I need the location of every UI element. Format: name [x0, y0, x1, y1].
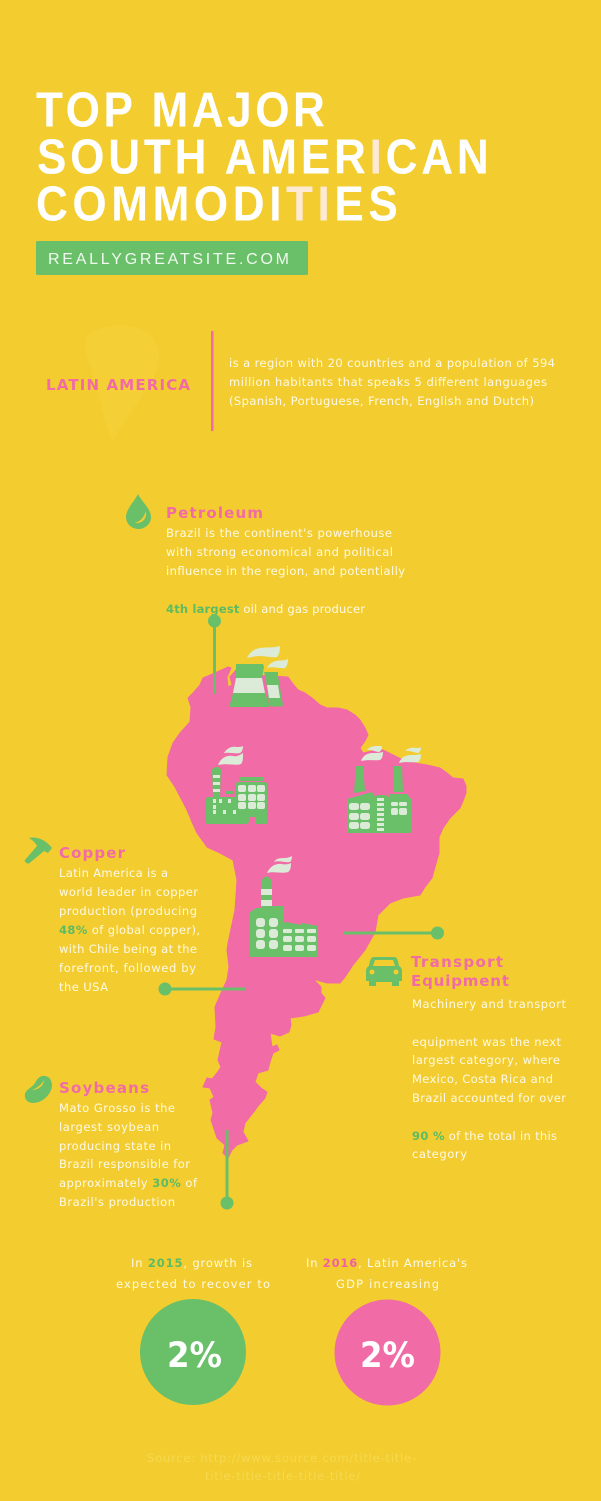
- soybeans text: Mato Grosso is the: [59, 1101, 175, 1115]
- transport text: equipment was the next: [412, 1035, 561, 1049]
- heading: soybeans: Soybeans: [59, 1079, 149, 1097]
- copper text: world leader in copper: [59, 885, 198, 899]
- caption: 2016: In 2016, Latin America's: [306, 1256, 467, 1270]
- intro text: million habitants that speaks 5 different languages: [229, 375, 547, 389]
- petroleum text: with strong economical and political: [166, 545, 393, 559]
- connector: soybeans: [220, 1130, 234, 1210]
- soybeans text: Brazil responsible for: [59, 1157, 190, 1171]
- circle: green 2%: [140, 1299, 246, 1405]
- petroleum text: Brazil is the continent's powerhouse: [166, 526, 392, 540]
- caption: 2015: expected to recover to: [116, 1277, 270, 1291]
- icon: factory south: [249, 856, 318, 957]
- icon: cooling towers: [230, 646, 288, 707]
- title: TOP MAJOR: [36, 82, 325, 137]
- transport text: category: [412, 1147, 467, 1161]
- heading: transport equipment: [411, 953, 509, 990]
- petroleum text: [166, 526, 405, 616]
- caption: 2016: [306, 1256, 467, 1291]
- transport text: Brazil accounted for over: [412, 1091, 566, 1105]
- soybeans text: [59, 1101, 198, 1209]
- source note: [147, 1451, 416, 1483]
- circle: pink 2%: 2%: [360, 1336, 415, 1376]
- icon: hammer: [24, 837, 52, 864]
- connector: copper: [158, 982, 245, 996]
- title: [36, 82, 489, 231]
- website badge: [36, 241, 308, 275]
- copper text: Latin America is a: [59, 866, 168, 880]
- panel: copper: [24, 837, 200, 994]
- circle: green 2%: 2%: [167, 1336, 222, 1376]
- stat: 2015 growth: [116, 1256, 270, 1405]
- soybeans text: largest soybean: [59, 1120, 159, 1134]
- icon: factory east: [347, 746, 421, 833]
- transport text: Machinery and transport: [412, 997, 566, 1011]
- heading: petroleum: Petroleum: [166, 504, 263, 522]
- connector: transport: [343, 926, 444, 940]
- website badge: REALLYGREATSITE.COM: [48, 251, 289, 268]
- heading: copper: Copper: [59, 844, 126, 862]
- copper text: 48% of global copper),: [59, 923, 200, 937]
- source note: title-title-title-title-title/: [205, 1469, 360, 1483]
- copper text: the USA: [59, 980, 108, 994]
- intro text: [229, 356, 555, 408]
- caption: 2015: In 2015, growth is: [131, 1256, 252, 1270]
- copper text: forefront, followed by: [59, 961, 196, 975]
- connector: petroleum: [208, 614, 221, 694]
- icon: car: [366, 957, 402, 986]
- circle: pink 2%: [334, 1300, 440, 1406]
- panel: transport equipment: [366, 953, 566, 1161]
- icon: soybean: [25, 1076, 52, 1103]
- soybeans text: Brazil's production: [59, 1195, 175, 1209]
- map: south america: [167, 667, 466, 1158]
- divider bar: [211, 331, 214, 431]
- heading: transport equipment: Equipment: [411, 972, 509, 990]
- heading: latin america: LATIN AMERICA: [46, 376, 190, 394]
- copper text: production (producing: [59, 904, 197, 918]
- petroleum text: influence in the region, and potentially: [166, 564, 405, 578]
- title: SOUTH AMERICAN: [37, 129, 489, 184]
- soybeans text: producing state in: [59, 1139, 171, 1153]
- soybeans text: approximately 30% of: [59, 1176, 198, 1190]
- intro text: (Spanish, Portuguese, French, English and Dutch): [229, 394, 534, 408]
- petroleum text: 4th largest oil and gas producer: [166, 602, 365, 616]
- transport text: 90 % of the total in this: [412, 1129, 557, 1143]
- caption: 2015: [116, 1256, 270, 1291]
- title: COMMODITIES: [36, 176, 398, 231]
- transport text: [412, 997, 566, 1161]
- copper text: with Chile being at the: [59, 942, 197, 956]
- heading: transport equipment: Transport: [411, 953, 503, 971]
- stat: 2016 gdp: [306, 1256, 467, 1406]
- faint map silhouette: [85, 325, 159, 442]
- icon: oil drop: [126, 494, 151, 529]
- transport text: largest category, where: [412, 1053, 560, 1067]
- panel: petroleum: [126, 494, 405, 694]
- transport text: Mexico, Costa Rica and: [412, 1072, 553, 1086]
- caption: 2016: GDP increasing: [336, 1277, 439, 1291]
- icon: factory west: [206, 746, 267, 824]
- panel: latin america intro: [46, 331, 555, 431]
- panel: soybeans: [25, 1076, 198, 1209]
- copper text: [59, 866, 200, 994]
- intro text: is a region with 20 countries and a population of 594: [229, 356, 555, 370]
- source note: Source: http://www.source.com/title-title-: [147, 1451, 416, 1465]
